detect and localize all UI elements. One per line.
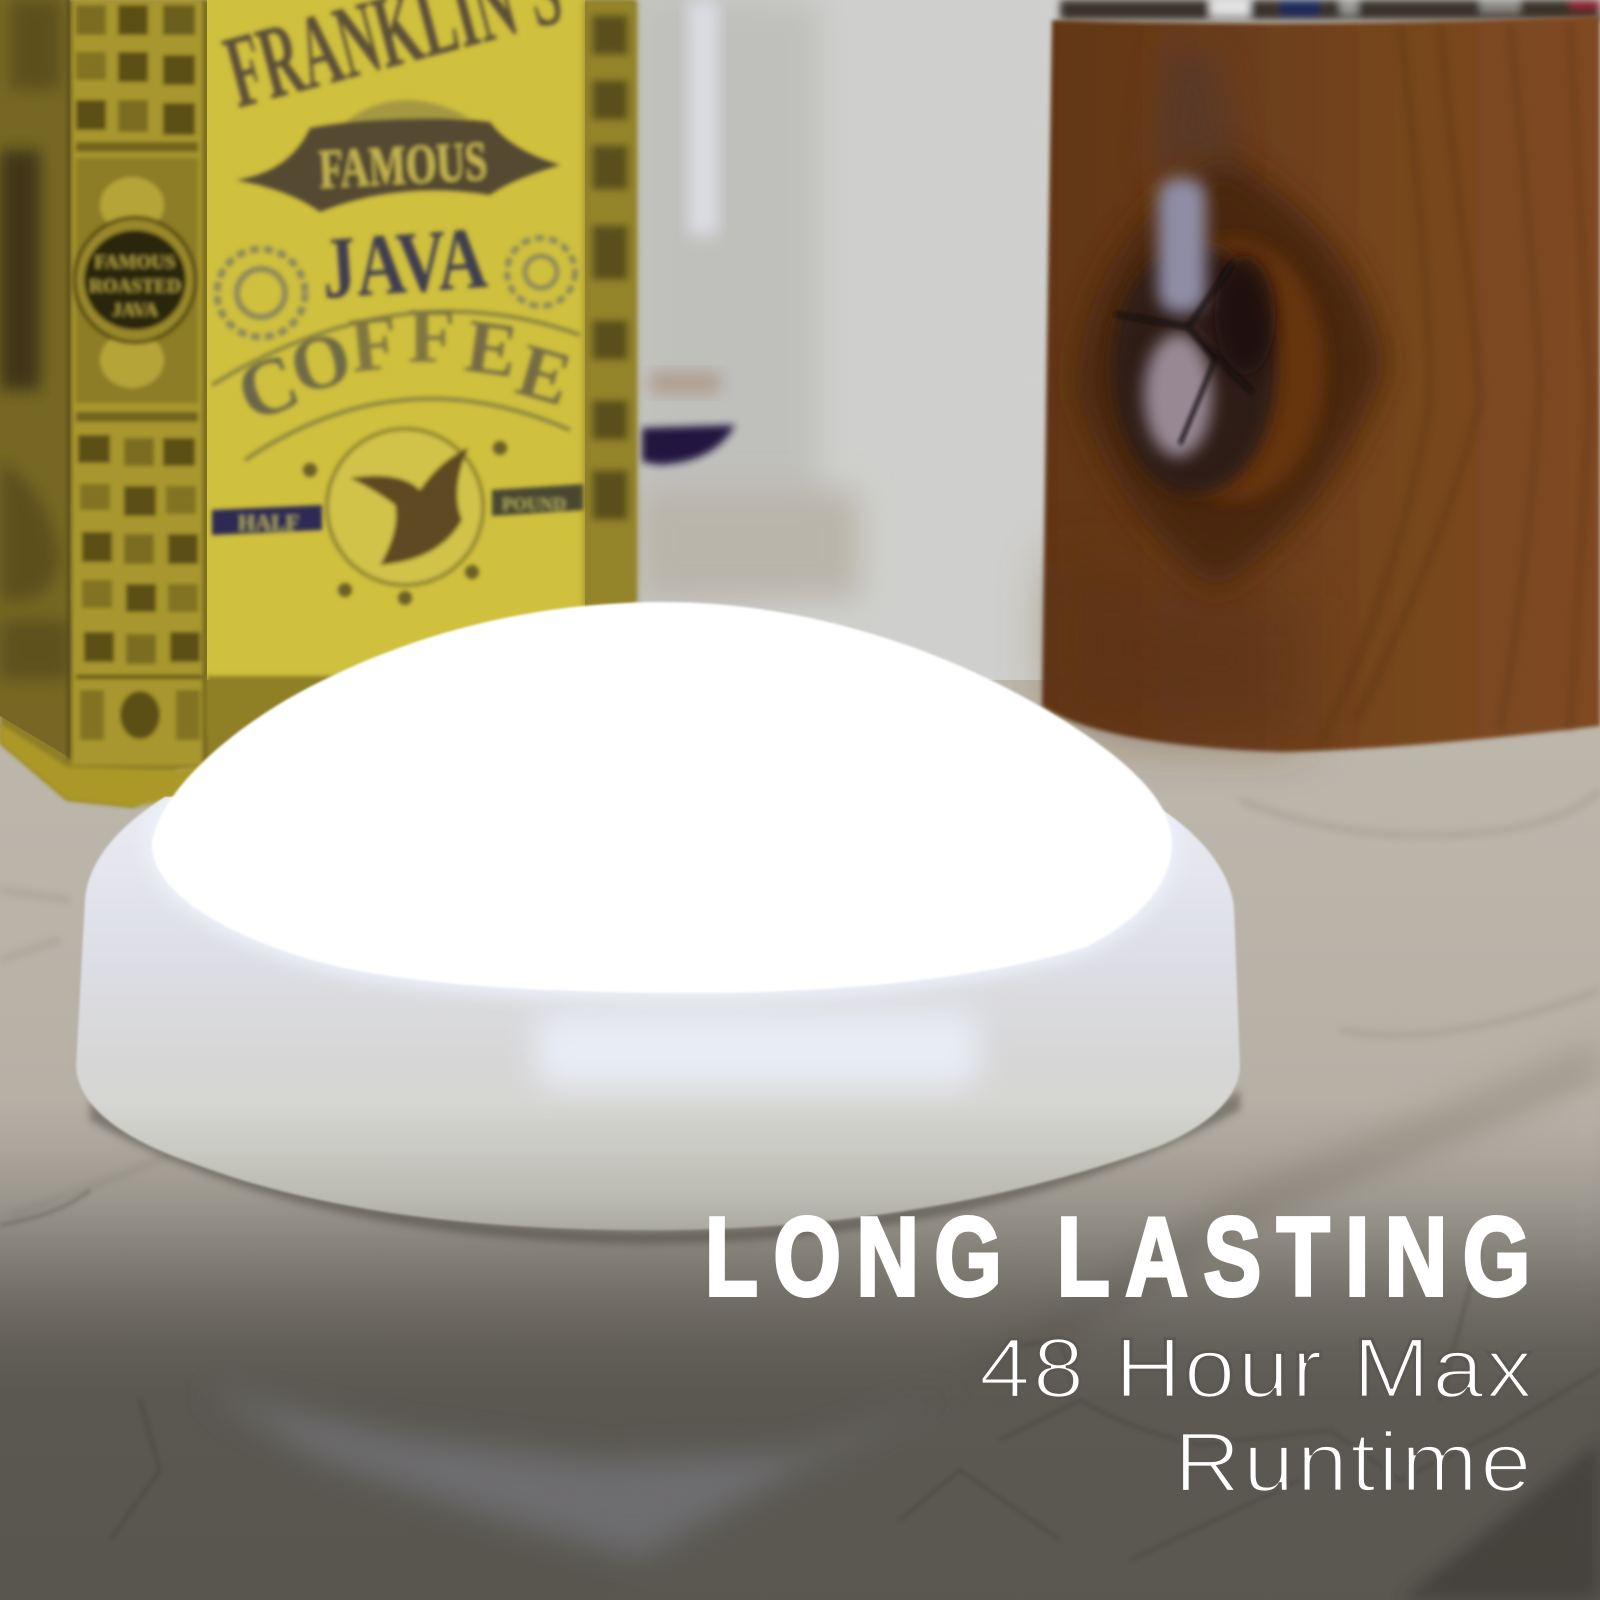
coffee lettering: E — [508, 328, 580, 422]
half pound band and eagle: HALF — [238, 510, 299, 535]
bottom dark overlay — [0, 1100, 1600, 1600]
wood knot — [1078, 50, 1385, 590]
dome glow edge — [149, 797, 1182, 1002]
line: runtime: Runtime — [1174, 1415, 1532, 1509]
background wall — [0, 0, 1600, 800]
tin bottom rim — [0, 723, 300, 807]
lamp base — [76, 797, 1240, 1230]
left grid panel — [68, 0, 206, 770]
metal items — [1060, 0, 1600, 20]
coffee lettering: C — [226, 336, 310, 439]
roasted java medallion — [75, 218, 195, 342]
contact shadow — [90, 1090, 1240, 1244]
push light — [76, 602, 1240, 1230]
base highlight — [535, 1012, 980, 1088]
java label: JAVA — [319, 210, 490, 318]
coffee lettering: F — [346, 297, 402, 389]
wooden cup — [1042, 0, 1600, 752]
counter top — [0, 680, 1600, 1600]
lower left dark wood — [1060, 560, 1300, 735]
roasted java medallion: FAMOUS — [95, 252, 175, 273]
coffee lettering — [212, 292, 580, 460]
famous banner — [236, 100, 560, 212]
yellow front panel — [207, 0, 585, 736]
half pound band and eagle: POUND — [502, 494, 566, 514]
lower right lighter surface — [600, 1085, 1600, 1600]
coffee lettering: F — [408, 292, 456, 379]
roasted java medallion: ROASTED — [89, 276, 181, 297]
counter reflection — [205, 1390, 960, 1560]
coffee lettering: O — [282, 315, 359, 410]
roasted java medallion: JAVA — [112, 300, 158, 321]
dome — [152, 602, 1172, 993]
famous banner: FAMOUS — [317, 130, 488, 201]
corner dark wedge — [1400, 1440, 1600, 1600]
marble veins — [0, 790, 1600, 1215]
right side panel — [585, 0, 636, 610]
tin body — [0, 0, 636, 807]
coffee tin — [0, 0, 636, 807]
subheading — [979, 1321, 1532, 1509]
heading: long lasting: LONG LASTING — [705, 1196, 1530, 1320]
line: 48 hour max: 48 Hour Max — [979, 1321, 1532, 1415]
far left panel — [0, 0, 70, 758]
surface veins over shade — [0, 1190, 1600, 1560]
half pound band and eagle — [212, 429, 584, 605]
wood grain — [1320, 25, 1590, 745]
coffee lettering: E — [461, 304, 523, 394]
counter edge band — [960, 1040, 1600, 1390]
blurred glass bottle — [640, 0, 860, 600]
java label — [217, 210, 575, 337]
